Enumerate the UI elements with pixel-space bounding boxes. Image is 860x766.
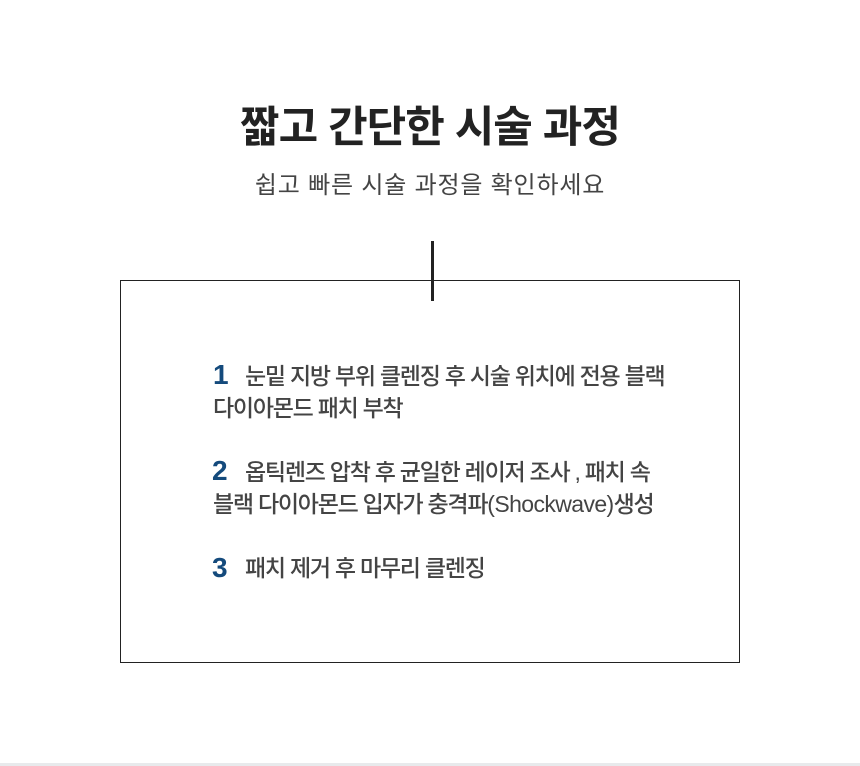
title: 짧고 간단한 시술 과정 — [240, 104, 620, 152]
step 2 number: 2 — [212, 455, 228, 486]
step 1 text line 2: 다이아몬드 패치 부착 — [213, 395, 402, 421]
step 1 text line 1: 눈밑 지방 부위 클렌징 후 시술 위치에 전용 블랙 — [245, 363, 664, 389]
panel: process steps — [120, 280, 740, 663]
step 1 number: 1 — [213, 359, 229, 390]
bottom edge band — [0, 763, 860, 766]
step 3 text: 패치 제거 후 마무리 클렌징 — [245, 555, 485, 581]
vertical connector line — [431, 241, 434, 301]
step 2 text line 1: 옵틱렌즈 압착 후 균일한 레이저 조사 , 패치 속 — [245, 459, 650, 485]
step 2 text line 2: 블랙 다이아몬드 입자가 충격파(Shockwave)생성 — [213, 491, 653, 517]
subtitle: 쉽고 빠른 시술 과정을 확인하세요 — [255, 172, 605, 199]
step 3 number: 3 — [212, 552, 228, 583]
